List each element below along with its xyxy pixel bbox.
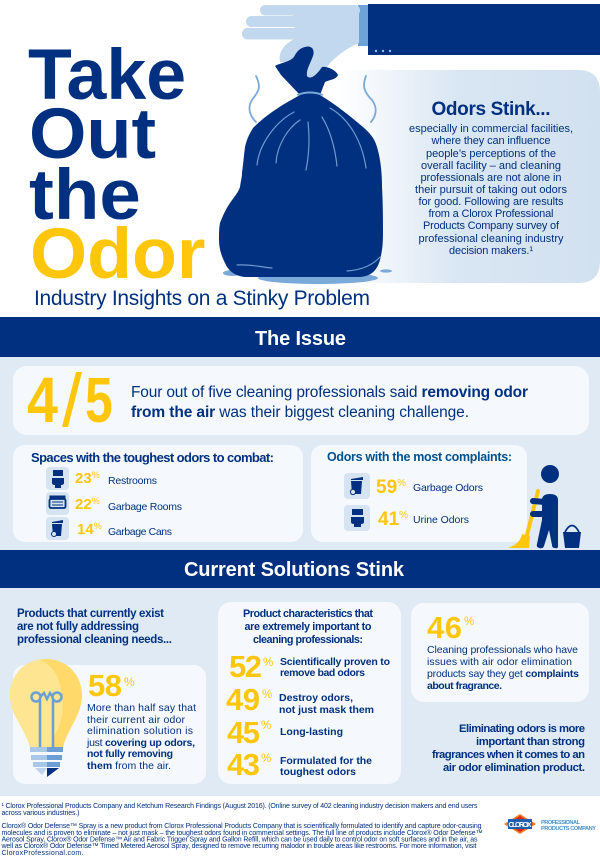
- icon: puddle: [223, 269, 392, 284]
- heading: products fall short: professional cleaning needs...: [17, 634, 172, 646]
- intro text: for good. Following are results: [418, 196, 564, 208]
- logo: clorox professional products company: CLOROX: [508, 822, 532, 829]
- panel: odors stink intro: [340, 70, 600, 283]
- callout: eliminating odors: fragrances when it comes to an: [432, 749, 585, 761]
- heading: products fall short: Products that currently exist: [17, 608, 164, 620]
- stat description: [427, 644, 579, 692]
- stat: 43 percent: 43: [227, 747, 260, 782]
- row: garbage odors: %: [397, 478, 406, 489]
- intro text: professional cleaning industry: [418, 233, 564, 245]
- stat: 4/5: 4: [27, 364, 59, 436]
- stat: 4/5: [27, 364, 113, 436]
- title: Odor: [30, 215, 206, 294]
- subtitle: Industry Insights on a Stinky Problem: [34, 287, 370, 310]
- intro text: overall facility – and cleaning: [421, 160, 561, 172]
- row: garbage cans: [46, 517, 172, 540]
- callout: eliminating odors: important than strong: [476, 736, 585, 748]
- row: restrooms: 23: [75, 470, 92, 487]
- panel: 46 percent: [411, 603, 589, 702]
- stat description: issues with air odor elimination: [427, 656, 572, 668]
- stat: 49 percent: %: [262, 689, 272, 701]
- footnote: CloroxProfessional.com.: [2, 850, 84, 857]
- row: urine odors: %: [399, 510, 408, 521]
- logo: clorox professional products company: PROFESSIONAL: [541, 820, 581, 826]
- heading: current solutions stink: Current Solutions Stink: [184, 559, 405, 581]
- heading: the issue: The Issue: [255, 328, 346, 350]
- intro text: professionals are not alone in: [420, 172, 562, 184]
- panel: 46 percent: %: [464, 616, 474, 628]
- title: Out: [29, 94, 156, 174]
- stat description: their current air odor: [87, 714, 186, 726]
- stat: 52 percent: [229, 649, 390, 684]
- heading: odors stink: Odors Stink...: [432, 99, 550, 120]
- row: garbage rooms: %: [92, 496, 100, 506]
- stat description: just covering up odors,: [86, 737, 195, 749]
- footnote: Aerosol Spray, Clorox® Odor Defense™ Air and Fabric Trigger Spray and Gallon Refill, which can be used daily to control odor on soft surfaces and in the air, as: [2, 836, 478, 844]
- stat: 4/5: 5: [85, 365, 113, 436]
- heading: characteristics: Product characteristics that: [243, 608, 373, 620]
- row: garbage odors: 59: [376, 477, 397, 498]
- icon: gloved hand: [242, 5, 360, 81]
- stat description: More than half say that: [87, 702, 196, 714]
- statement text: from the air was their biggest cleaning challenge.: [131, 404, 469, 421]
- stat: 45 percent: 45: [227, 715, 260, 750]
- heading: most complaints: Odors with the most complaints:: [327, 450, 512, 464]
- row: garbage cans: 14: [77, 521, 94, 538]
- callout: eliminating odors: Eliminating odors is more: [459, 723, 585, 735]
- icon: garbage bag: [219, 47, 383, 277]
- row: urine odors: Urine Odors: [413, 514, 469, 526]
- stat: 49 percent: Destroy odors,: [279, 692, 353, 704]
- callout: eliminating odors: air odor elimination product.: [443, 762, 585, 774]
- row: garbage rooms: 22: [75, 496, 92, 513]
- stat: 43 percent: [227, 747, 372, 782]
- icon: light bulb: [10, 659, 82, 777]
- title: [28, 35, 206, 294]
- title: Take: [28, 35, 186, 115]
- panel: four out of five: [13, 364, 589, 436]
- row: urine odors: 41: [378, 509, 399, 530]
- stat: 45 percent: %: [261, 720, 271, 732]
- heading: characteristics: cleaning professionals:: [253, 634, 363, 646]
- logo: clorox professional products company: [504, 814, 596, 834]
- stat: 43 percent: Formulated for the: [280, 755, 372, 767]
- heading: characteristics: [243, 608, 373, 646]
- panel: 58 percent: %: [124, 675, 135, 689]
- icon: janitor with mop and bucket: [508, 465, 581, 548]
- stat description: Cleaning professionals who have: [427, 644, 578, 656]
- section band: the issue: [0, 317, 600, 357]
- row: restrooms: Restrooms: [108, 475, 157, 487]
- icon: stink lines: [249, 76, 376, 122]
- panel: product characteristics: [218, 602, 401, 784]
- intro text: where they can influence: [430, 135, 550, 147]
- heading: characteristics: are extremely important to: [244, 621, 372, 633]
- stat: 58: 58: [88, 668, 122, 703]
- section background: [0, 588, 600, 796]
- row: garbage cans: %: [94, 521, 102, 531]
- row: garbage rooms: Garbage Rooms: [108, 501, 182, 513]
- stat: 49 percent: 49: [226, 682, 260, 717]
- stat description: elimination solution is: [87, 725, 193, 737]
- stat description: not fully removing: [87, 748, 173, 760]
- section background: [0, 357, 600, 550]
- row: garbage odors: Garbage Odors: [413, 482, 483, 494]
- stat description: products say they get complaints: [427, 668, 579, 680]
- heading: products fall short: [17, 608, 172, 646]
- stat: 43 percent: %: [261, 753, 271, 765]
- row: urine odors: [344, 505, 469, 531]
- title: the: [29, 156, 141, 235]
- intro text: from a Clorox Professional: [428, 208, 554, 220]
- stat: 43 percent: toughest odors: [280, 766, 356, 778]
- stat: 52 percent: 52: [229, 649, 262, 684]
- stat description: them from the air.: [87, 760, 171, 772]
- heading: toughest spaces: Spaces with the toughest odors to combat:: [31, 450, 274, 465]
- stat description: about fragrance.: [427, 680, 502, 692]
- callout: eliminating odors: [432, 723, 585, 774]
- stat description: [86, 702, 196, 772]
- statement text: [131, 384, 528, 421]
- stat: 45 percent: [227, 715, 343, 750]
- intro text: Products Company survey of: [423, 220, 560, 232]
- intro text: especially in commercial facilities,: [409, 123, 573, 135]
- row: garbage cans: Garbage Cans: [108, 526, 172, 538]
- panel: 58 percent: [10, 659, 206, 784]
- stat: 52 percent: remove bad odors: [280, 667, 365, 679]
- stat: 52 percent: %: [263, 657, 273, 669]
- intro text: people’s perceptions of the: [426, 148, 556, 160]
- row: garbage rooms: [46, 492, 182, 515]
- row: garbage odors: [344, 473, 483, 499]
- row: restrooms: [46, 467, 157, 490]
- footnote: [0, 803, 482, 857]
- footnote: ¹ Clorox Professional Products Company and Ketchum Research Findings (August 2016). (Online survey of 402 cleaning industry decision makers and end users: [2, 803, 478, 810]
- logo: clorox professional products company: PRODUCTS COMPANY: [541, 826, 596, 832]
- section band: current solutions: [0, 550, 600, 588]
- row: restrooms: %: [92, 470, 100, 480]
- footnote: molecules and is proven to eliminate – not just mask – the toughest odors found in commercial settings. The full line of products include Clorox® Odor Defense™: [2, 829, 482, 837]
- statement text: Four out of five cleaning professionals said removing odor: [131, 384, 528, 401]
- stat: 49 percent: not just mask them: [279, 704, 374, 716]
- stat: 49 percent: [226, 682, 374, 717]
- stat: 45 percent: Long-lasting: [280, 726, 343, 738]
- footnote: well as Clorox® Odor Defense™ Timed Metered Aerosol Spray, designed to remove recurring malodor in trouble areas like restrooms. For more information, visit: [0, 842, 477, 850]
- intro text: their pursuit of taking out odors: [415, 184, 568, 196]
- footnote: across various industries.): [2, 810, 80, 817]
- stat: 52 percent: Scientifically proven to: [280, 656, 390, 668]
- intro text: decision makers.¹: [449, 245, 533, 257]
- intro text: [409, 123, 573, 257]
- stat: 46: 46: [427, 610, 462, 645]
- icon: sleeve cuff: [358, 4, 600, 55]
- heading: products fall short: are not fully addressing: [17, 621, 139, 633]
- footnote: Clorox® Odor Defense™ Spray is a new product from Clorox Professional Products Company that is scientifically formulated to identify and capture odor-causing: [2, 822, 482, 830]
- panel: toughest spaces: [13, 445, 303, 542]
- panel: most complaints: [311, 445, 527, 542]
